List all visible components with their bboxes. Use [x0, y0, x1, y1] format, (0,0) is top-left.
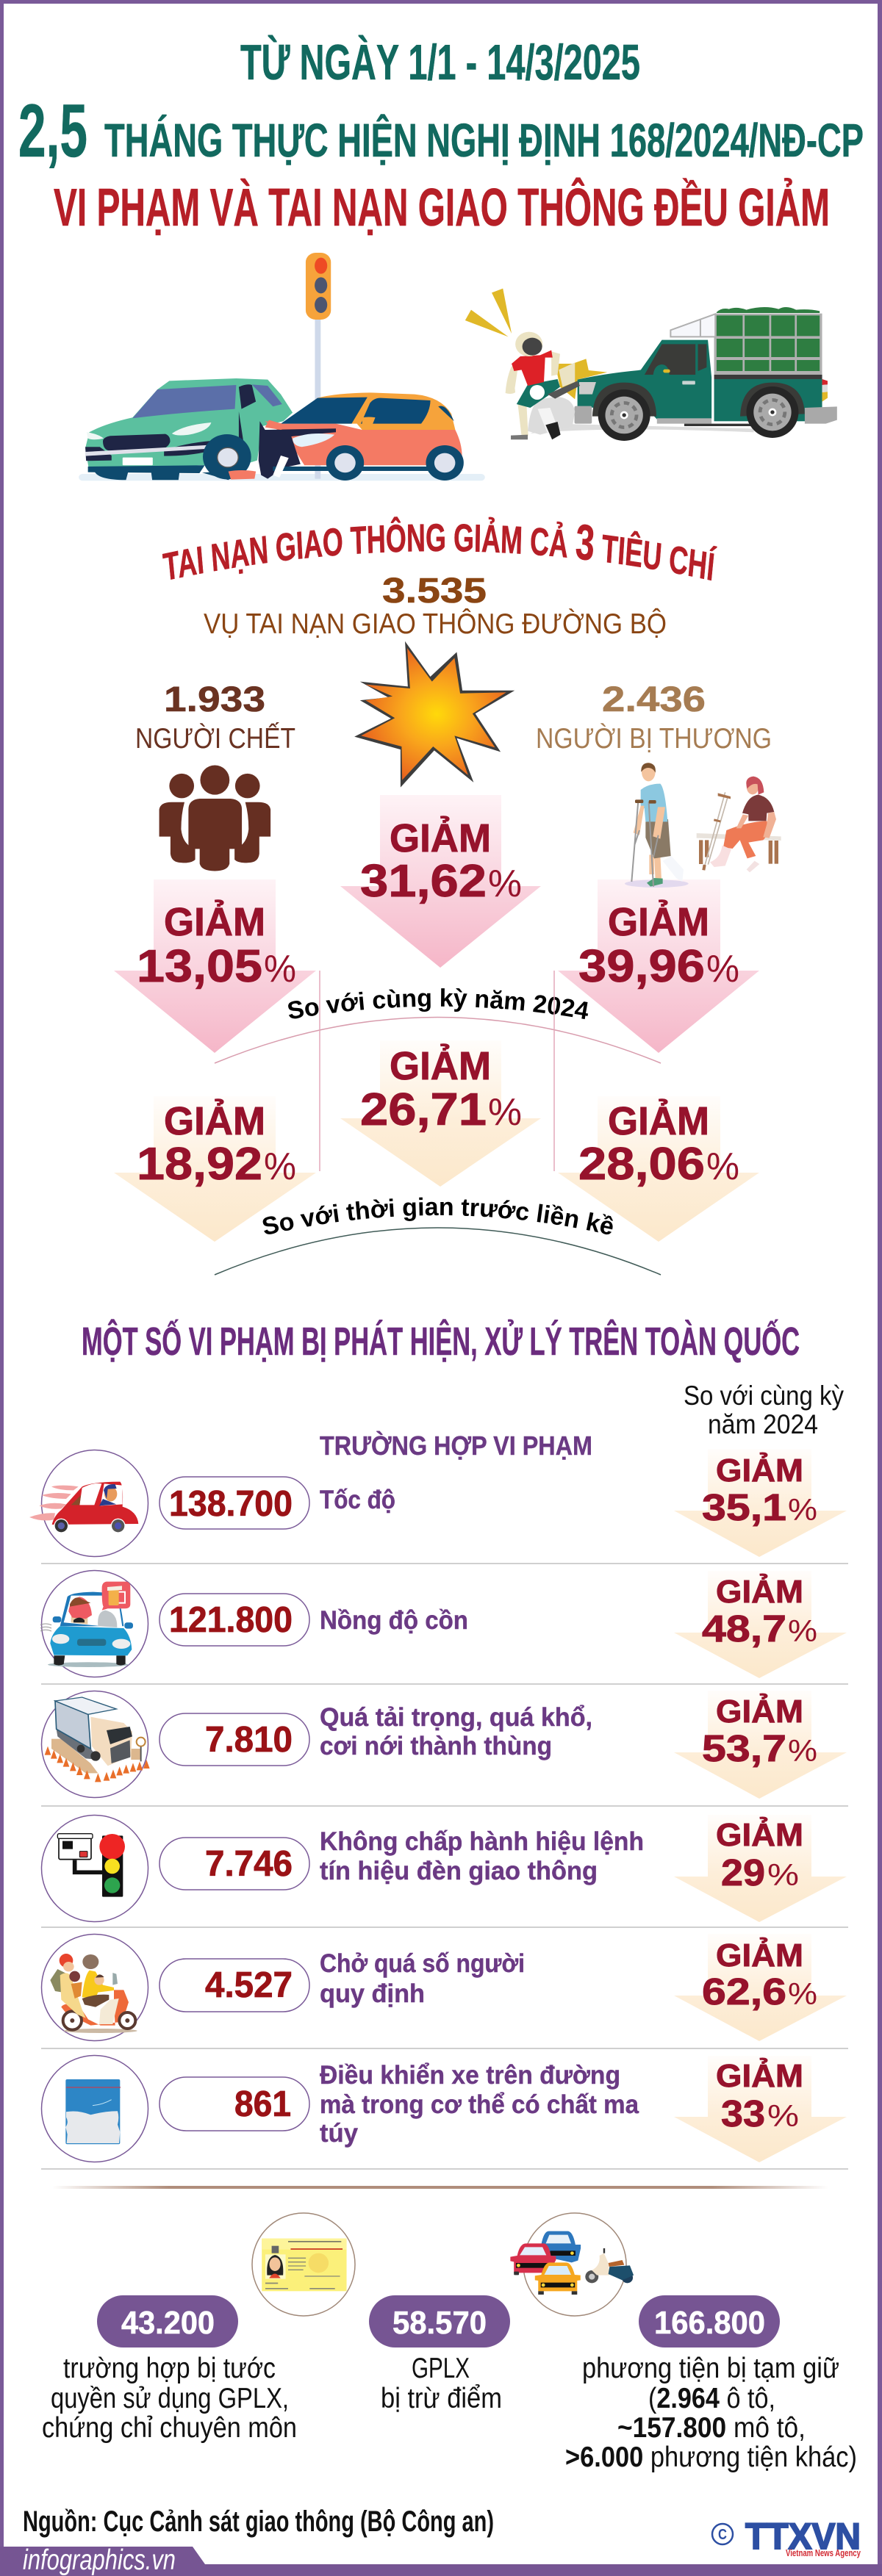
row: alcohol — [40, 1571, 847, 1678]
arrow: -29% — [674, 1815, 847, 1922]
value pill: 138.700 — [159, 1477, 309, 1529]
stat: 43.200 licences revoked: chứng chỉ chuyên môn — [42, 2412, 297, 2444]
arrow: -35,1%: GIẢM — [716, 1452, 803, 1489]
label: disobeying signals: Không chấp hành hiệu lệnh — [320, 1827, 644, 1856]
arrow: -33% — [674, 2056, 847, 2162]
arrow: injured -28,06% — [558, 1096, 759, 1242]
label: alcohol level: Nồng độ cồn — [320, 1606, 468, 1635]
arrow: injured -39,96%: GIẢM — [608, 900, 709, 944]
value pill: 861 — [159, 2077, 309, 2131]
stat: 1.933 deaths: NGƯỜI CHẾT — [135, 722, 295, 755]
label: driving with drugs: Điều khiển xe trên đường — [320, 2061, 620, 2090]
icon: drunk driver in blue car — [40, 1571, 148, 1677]
footer bar with site name: infographics.vn — [23, 2544, 176, 2576]
arrow: -62,6%: % — [788, 1976, 817, 2011]
title line 2: decree — [18, 89, 864, 173]
logo: TTXVN: TTXVN — [745, 2516, 861, 2557]
stat: 2.436 injured: 2.436 — [602, 680, 706, 719]
arrow: -33%: % — [767, 2098, 799, 2133]
stat: 58.570 licences with points deducted — [369, 2295, 510, 2414]
value pill: 7.810: 7.810 — [205, 1720, 293, 1760]
arrow: -48,7%: GIẢM — [716, 1573, 803, 1610]
source line: Nguồn: Cục Cảnh sát giao thông (Bộ Công an) — [23, 2505, 494, 2538]
label: disobeying signals: tín hiệu đèn giao thông — [320, 1857, 598, 1885]
stat: 2.436 injured: NGƯỜI BỊ THƯƠNG — [536, 723, 772, 755]
stat: 58.570 licences with points deducted: GPLX — [412, 2353, 470, 2384]
pill: 43.200: 43.200 — [121, 2305, 215, 2341]
arrow: accidents -31,62%: GIẢM — [390, 816, 491, 860]
arrow: -48,7%: % — [788, 1613, 817, 1648]
stat: 43.200 licences revoked: quyền sử dụng GPLX, — [51, 2383, 289, 2414]
arrow: -53,7%: GIẢM — [716, 1693, 803, 1730]
column header: compared with 2024: năm 2024 — [708, 1409, 818, 1439]
value pill: 7.746 — [159, 1838, 309, 1890]
arrow: injured -39,96%: % — [706, 948, 739, 990]
arrow: deaths -13,05% — [114, 879, 316, 1053]
arrows: compared with the same period 2024 — [114, 795, 759, 1053]
arrow: deaths -18,92%: 18,92 — [137, 1139, 262, 1190]
arrow: deaths -13,05%: 13,05 — [137, 941, 262, 992]
stat: 43.200 licences revoked: trường hợp bị tước — [63, 2353, 276, 2384]
value pill: 7.810 — [159, 1713, 309, 1766]
label: overload: cơi nới thành thùng — [320, 1732, 552, 1760]
arrow: -48,7% — [674, 1571, 847, 1678]
row: drugs — [41, 2056, 847, 2162]
stat: 166.800 vehicles impounded — [565, 2295, 857, 2473]
footer bar with site name — [0, 2544, 882, 2576]
stat: 166.800 vehicles impounded: (2.964 ô tô, — [648, 2383, 775, 2414]
arrow: -62,6%: GIẢM — [716, 1937, 803, 1974]
section heading: accidents fall on 3 criteria (curved): TAI NẠN GIAO THÔNG GIẢM CẢ 3 TIÊU CHÍ — [162, 517, 717, 580]
label: overload — [320, 1703, 592, 1760]
arrow: -35,1%: 35,1 — [702, 1486, 786, 1528]
arrow: deaths -13,05%: GIẢM — [164, 900, 265, 944]
stat: 166.800 vehicles impounded: ~157.800 mô tô, — [617, 2412, 806, 2444]
arrow: accidents -26,71%: GIẢM — [390, 1044, 491, 1088]
value pill: 7.746: 7.746 — [205, 1844, 293, 1884]
stat: 166.800 vehicles impounded: >6.000 phương tiện khác) — [565, 2442, 857, 2473]
stat: 58.570 licences with points deducted: bị trừ điểm — [381, 2383, 502, 2414]
value pill: 861: 861 — [234, 2084, 291, 2124]
arrow: -29%: GIẢM — [716, 1816, 803, 1853]
arrow: -62,6% — [674, 1934, 847, 2041]
icon: explosion — [354, 641, 514, 788]
title block — [18, 35, 864, 237]
label: overload: Quá tải trọng, quá khổ, — [320, 1703, 592, 1732]
arrow: -62,6%: 62,6 — [702, 1971, 786, 2012]
column header: violation cases: TRƯỜNG HỢP VI PHẠM — [320, 1430, 592, 1461]
stat: 1.933 deaths — [135, 680, 295, 755]
arrow: injured -28,06%: GIẢM — [608, 1099, 709, 1143]
arrow: -33%: GIẢM — [716, 2057, 803, 2094]
stat: 43.200 licences revoked — [42, 2295, 297, 2444]
title line 1: date range: TỪ NGÀY 1/1 - 14/3/2025 — [240, 35, 640, 90]
arrow: accidents -26,71%: 26,71 — [360, 1084, 487, 1135]
arrow: accidents -26,71%: % — [488, 1091, 522, 1134]
icon: group of people — [159, 765, 270, 871]
label: too many passengers: quy định — [320, 1979, 425, 2008]
stat: 1.933 deaths: 1.933 — [164, 680, 265, 719]
arrow: -29%: % — [767, 1857, 799, 1892]
label: compared with same period 2024 (curved): So với cùng kỳ năm 2024 — [288, 988, 588, 1020]
column header: compared with 2024 — [684, 1381, 844, 1439]
pill: 166.800 — [639, 2295, 780, 2347]
stat: 3.535 road accidents: VỤ TAI NẠN GIAO THÔNG ĐƯỜNG BỘ — [204, 608, 667, 640]
stat: 2.436 injured — [536, 680, 772, 755]
value pill: 4.527 — [159, 1959, 309, 2012]
pill: 43.200 — [97, 2295, 238, 2347]
arrow: injured -39,96% — [558, 879, 759, 1053]
arrow: -53,7%: 53,7 — [702, 1727, 786, 1769]
row: traffic signal — [41, 1815, 847, 1922]
stat: 166.800 vehicles impounded: phương tiện bị tạm giữ — [582, 2353, 839, 2384]
icon: overloaded truck with cones — [41, 1691, 150, 1797]
arrow: -53,7% — [674, 1691, 847, 1799]
arrow: -29%: 29 — [721, 1852, 765, 1893]
icon: camera and traffic light — [41, 1815, 148, 1922]
icon: family on motorbike — [41, 1934, 148, 2041]
row: too many passengers — [41, 1934, 847, 2041]
label: too many passengers — [320, 1949, 525, 2008]
row: overload — [41, 1691, 847, 1799]
row: speeding — [29, 1449, 847, 1557]
label: disobeying signals — [320, 1827, 644, 1885]
arrow: injured -28,06%: 28,06 — [578, 1139, 705, 1190]
label: compared with previous period (curved): So với thời gian trước liền kề — [263, 1198, 613, 1234]
label: driving with drugs: mà trong cơ thể có chất ma — [320, 2090, 639, 2119]
icon: injured man and woman on crutches — [625, 763, 781, 888]
icon: driving licence card — [252, 2213, 355, 2316]
arrow: deaths -18,92%: % — [264, 1145, 296, 1188]
column header: compared with 2024: So với cùng kỳ — [684, 1381, 844, 1411]
pill: 58.570: 58.570 — [392, 2305, 487, 2341]
value pill: 121.800 — [159, 1594, 309, 1646]
arrow: -48,7%: 48,7 — [702, 1608, 786, 1649]
value pill: 4.527: 4.527 — [205, 1965, 293, 2005]
arrow: accidents -31,62%: % — [488, 863, 522, 905]
illustration: car crash at traffic light — [79, 253, 485, 481]
icon: drug bag — [41, 2056, 148, 2162]
value pill: 121.800: 121.800 — [169, 1600, 293, 1640]
arrows: compared with the previous period — [114, 1040, 759, 1242]
stat: 3.535 road accidents — [204, 572, 667, 640]
arrow: injured -39,96%: 39,96 — [578, 941, 705, 992]
illustration: motorbike and green truck collision — [465, 289, 837, 441]
arrow: accidents -26,71% — [340, 1040, 541, 1187]
icon: speeding red car — [29, 1450, 148, 1556]
arrow: -33%: 33 — [721, 2093, 765, 2134]
icon: cars and motorbike — [510, 2213, 634, 2316]
value pill: 138.700: 138.700 — [169, 1484, 293, 1524]
label: driving with drugs — [320, 2061, 639, 2148]
arrow: -53,7%: % — [788, 1733, 817, 1768]
label: driving with drugs: túy — [320, 2119, 359, 2148]
label: speed: Tốc độ — [320, 1486, 395, 1514]
stat: 3.535 road accidents: 3.535 — [382, 572, 487, 611]
arrow: -35,1%: % — [788, 1492, 817, 1527]
arrow: accidents -31,62% — [340, 795, 541, 968]
title line 2: decree: 2,5 — [18, 89, 87, 173]
arrow: injured -28,06%: % — [706, 1145, 739, 1188]
pill: 166.800: 166.800 — [654, 2305, 765, 2341]
arrow: deaths -18,92% — [114, 1096, 316, 1242]
arrow: accidents -31,62%: 31,62 — [360, 856, 487, 907]
pill: 58.570 — [369, 2295, 510, 2347]
arrow: deaths -13,05%: % — [264, 948, 296, 990]
label: too many passengers: Chở quá số người — [320, 1949, 525, 1978]
arrow: deaths -18,92%: GIẢM — [164, 1099, 265, 1143]
arrow: -35,1% — [674, 1449, 847, 1557]
logo: TTXVN: C — [718, 2527, 727, 2543]
